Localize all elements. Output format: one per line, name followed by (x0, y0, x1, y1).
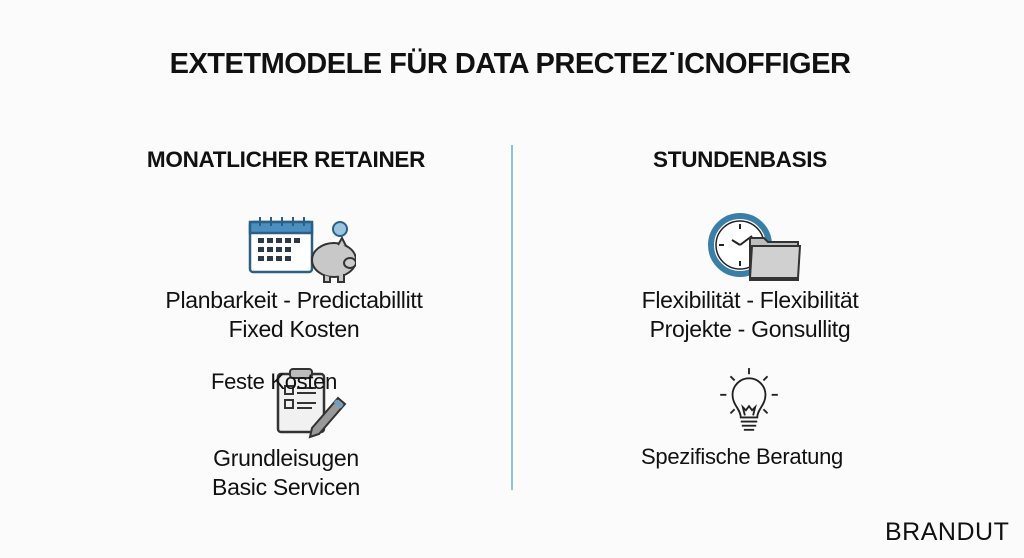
text block (165, 287, 423, 342)
heading right: STUNDENBASIS (653, 147, 827, 172)
divider (511, 145, 513, 490)
text block: Planbarkeit - Predictabillitt (165, 287, 423, 313)
text block: Fixed Kosten (229, 316, 359, 342)
text block (642, 287, 859, 342)
text block (212, 445, 360, 500)
brand logo: BRANDUT (885, 518, 1009, 546)
title: EXTETMODELE FÜR DATA PRECTEZ˙ICNOFFIGER (170, 48, 850, 80)
icon: clipboard with pencil (276, 368, 346, 438)
text block: Projekte - Gonsullitg (650, 316, 850, 342)
text block: Grundleisugen (213, 445, 359, 471)
panel: stundenbasis (641, 147, 859, 469)
text block: Basic Servicen (212, 474, 360, 500)
icon: light bulb (720, 368, 778, 431)
icon: clock and folder (708, 213, 802, 281)
label: Feste Kosten (211, 369, 337, 394)
panel: monatlicher retainer (147, 147, 425, 500)
heading left: MONATLICHER RETAINER (147, 147, 425, 172)
text block: Spezifische Beratung (641, 444, 843, 469)
icon: calendar and piggy bank (248, 217, 356, 283)
text block: Flexibilität - Flexibilität (642, 287, 858, 313)
